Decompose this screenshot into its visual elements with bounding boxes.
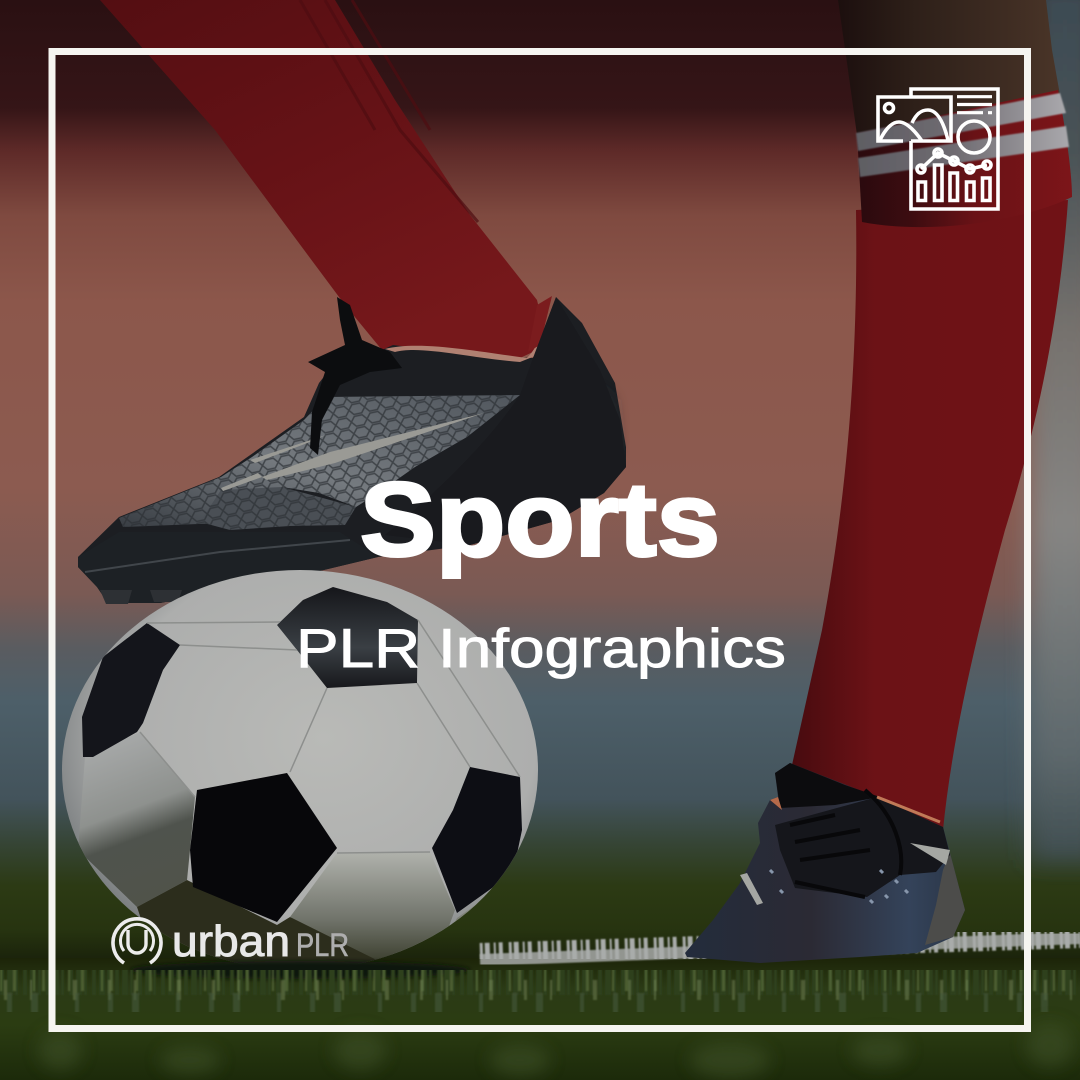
ball: seams between white panels: [140, 620, 520, 853]
logo: urbanPLR: [113, 917, 349, 966]
title: Sports: [360, 462, 720, 578]
right shoe: [685, 763, 965, 963]
grass blades: [0, 976, 1080, 1006]
icon: circle: [958, 121, 990, 153]
ball shadow: [130, 961, 470, 979]
logo: urbanPLR: PLR: [296, 927, 349, 963]
icon: picture: [878, 97, 951, 141]
subtitle: PLR Infographics: [296, 617, 786, 679]
boot collar trim: [385, 297, 560, 362]
boot heel counter: [385, 297, 626, 545]
right leg: skin: [838, 0, 1060, 135]
left boot: [78, 296, 626, 604]
grass blades and foreground: [0, 961, 1080, 1078]
sock cuff band: [857, 90, 1072, 227]
ball: black panels: [82, 587, 522, 922]
logo wordmark: urban: [172, 917, 290, 966]
boot sole: [78, 532, 378, 603]
soccer ball: [60, 570, 538, 985]
sock cuff stripes: [856, 93, 1069, 177]
icon: line chart: [917, 149, 991, 173]
logo mark: [113, 919, 161, 963]
icon: bars: [918, 165, 990, 200]
ball: shaded white panels: [78, 732, 476, 964]
icon: text lines: [957, 97, 992, 113]
blurred foreground grass: [38, 1023, 1074, 1078]
boot honeycomb upper: [119, 395, 520, 530]
white touchline: [0, 936, 1080, 962]
boot heel highlight: [540, 370, 615, 470]
right leg: red sock: [792, 90, 1072, 830]
icon: infographic document: [878, 89, 998, 209]
left leg: red sock: [100, 0, 548, 358]
icon: page outline: [911, 89, 998, 209]
grass field base: [0, 958, 1080, 1080]
boot laces: [308, 297, 402, 455]
